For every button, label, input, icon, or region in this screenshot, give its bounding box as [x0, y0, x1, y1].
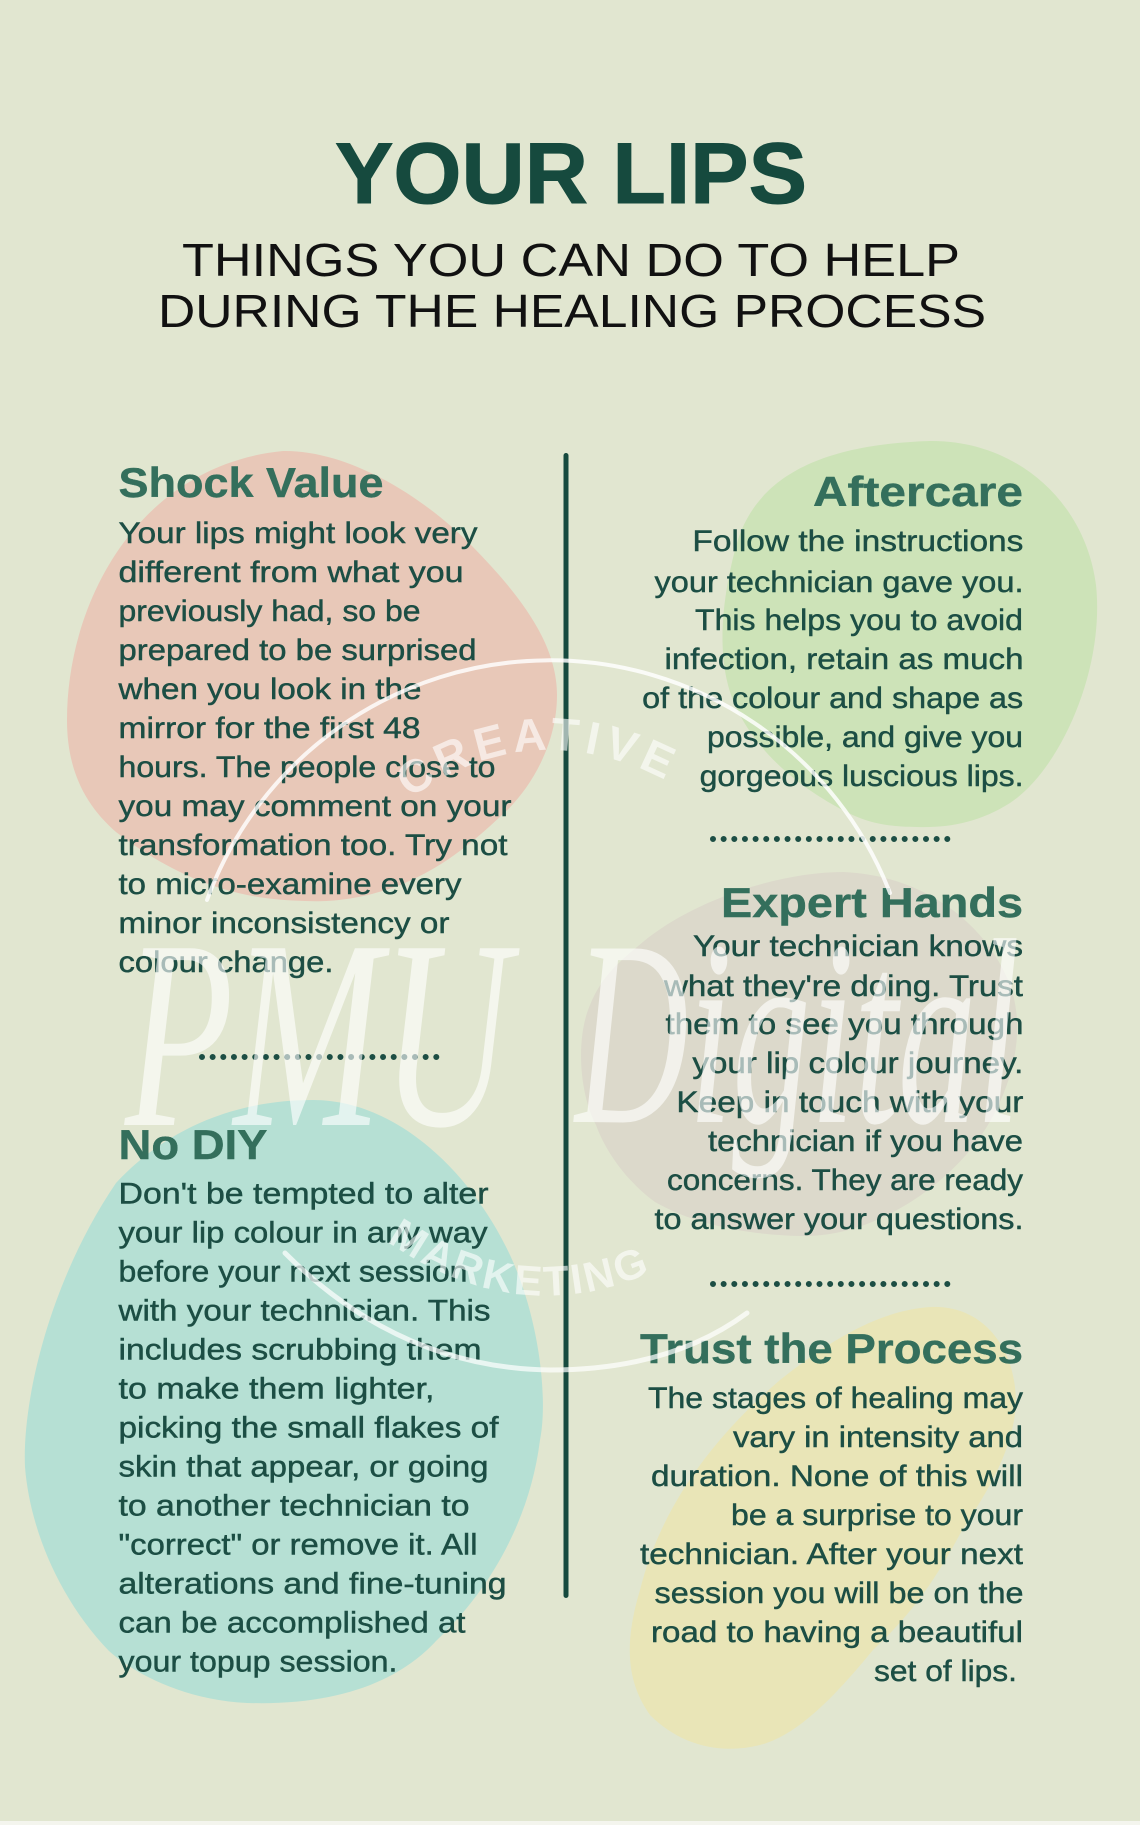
body: Aftercare: This helps you to avoid [695, 604, 1023, 637]
centre divider [564, 453, 568, 1598]
panel: Expert Hands [654, 879, 1024, 1236]
body: Expert Hands: what they're doing. Trust [663, 970, 1024, 1003]
body: No DIY [117, 1178, 506, 1678]
body: Aftercare [642, 525, 1024, 793]
body: Aftercare: possible, and give you [707, 721, 1023, 754]
heading: Aftercare: Aftercare [813, 468, 1023, 515]
body: Shock Value: you may comment on your [118, 790, 512, 823]
body: No DIY: with your technician. This [117, 1294, 490, 1328]
body: Shock Value: to micro-examine every [118, 868, 462, 901]
body: Trust the Process: technician. After your next [640, 1538, 1024, 1571]
panel: Aftercare [642, 468, 1024, 793]
body: No DIY: to another technician to [118, 1490, 469, 1522]
body: Trust the Process [640, 1382, 1024, 1688]
body: Aftercare: of the colour and shape as [642, 682, 1023, 715]
subtitle [158, 234, 986, 337]
subtitle: DURING THE HEALING PROCESS [158, 285, 986, 337]
body: Shock Value: minor inconsistency or [118, 907, 450, 940]
body: No DIY: to make them lighter, [118, 1372, 434, 1406]
blob: yellow [630, 1307, 1016, 1749]
body: Expert Hands: your lip colour journey. [692, 1047, 1023, 1080]
body: Shock Value: when you look in the [117, 673, 421, 706]
heading: Expert Hands: Expert Hands [721, 879, 1023, 926]
body: No DIY: your topup session. [118, 1646, 398, 1678]
body: Aftercare: gorgeous luscious lips. [700, 760, 1024, 793]
watermark [122, 658, 1020, 1372]
body: Trust the Process: duration. None of this will [651, 1460, 1023, 1493]
body: Shock Value [117, 517, 512, 979]
blob: taupe [581, 872, 1017, 1236]
body: Expert Hands: to answer your questions. [654, 1203, 1024, 1236]
body: Expert Hands: technician if you have [708, 1125, 1023, 1158]
body: Trust the Process: The stages of healing may [648, 1382, 1023, 1415]
body: Shock Value: different from what you [118, 556, 463, 589]
body: Expert Hands: them to see you through [666, 1008, 1024, 1041]
body: Aftercare: infection, retain as much [664, 643, 1024, 676]
body: Aftercare: your technician gave you. [654, 566, 1024, 599]
body: Expert Hands: Your technician knows [693, 930, 1023, 963]
heading: Trust the Process: Trust the Process [640, 1325, 1023, 1372]
body: No DIY: alterations and fine-tuning [118, 1568, 506, 1600]
panel: Shock Value [117, 459, 512, 979]
blob: teal [25, 1100, 543, 1703]
body: No DIY: picking the small flakes of [118, 1412, 499, 1444]
body: Shock Value: Your lips might look very [118, 517, 478, 550]
body: Expert Hands [654, 930, 1024, 1236]
heading: Shock Value: Shock Value [118, 459, 384, 506]
body: Trust the Process: be a surprise to your [731, 1499, 1023, 1532]
body: No DIY: before your next session [118, 1256, 468, 1288]
panel: Trust the Process [640, 1325, 1024, 1688]
dotted separator right 1 [713, 836, 957, 842]
body: Shock Value: transformation too. Try not [118, 829, 508, 862]
body: Aftercare: Follow the instructions [692, 525, 1023, 558]
body: Trust the Process: set of lips. [874, 1655, 1017, 1688]
body: No DIY: Don't be tempted to alter [118, 1178, 488, 1210]
body: No DIY: your lip colour in any way [118, 1216, 488, 1250]
watermark: CREATIVE [399, 718, 676, 792]
body: No DIY: includes scrubbing them [118, 1334, 482, 1366]
body: No DIY: "correct" or remove it. All [118, 1528, 478, 1562]
watermark: PMU [122, 885, 520, 1184]
heading: No DIY: No DIY [118, 1121, 268, 1168]
watermark: MARKETING [389, 1218, 646, 1296]
body: Expert Hands: concerns. They are ready [667, 1164, 1023, 1197]
body: No DIY: can be accomplished at [118, 1606, 466, 1640]
body: Expert Hands: Keep in touch with your [676, 1086, 1023, 1119]
body: Shock Value: colour change. [118, 946, 334, 979]
panel: No DIY [117, 1121, 506, 1678]
body: No DIY: skin that appear, or going [118, 1450, 488, 1484]
body: Shock Value: hours. The people close to [118, 751, 496, 784]
dotted separator right 2 [713, 1281, 957, 1287]
body: Trust the Process: session you will be on the [654, 1577, 1024, 1610]
blob: red [67, 451, 557, 901]
body: Shock Value: previously had, so be [118, 595, 420, 628]
dotted separator left [202, 1054, 442, 1060]
body: Shock Value: prepared to be surprised [118, 634, 476, 667]
subtitle: THINGS YOU CAN DO TO HELP [182, 234, 960, 286]
title: YOUR LIPS [335, 126, 807, 222]
body: Trust the Process: vary in intensity and [733, 1421, 1023, 1454]
body: Shock Value: mirror for the first 48 [118, 712, 420, 745]
body: Trust the Process: road to having a beautiful [651, 1616, 1023, 1649]
blob: green [722, 441, 1097, 827]
